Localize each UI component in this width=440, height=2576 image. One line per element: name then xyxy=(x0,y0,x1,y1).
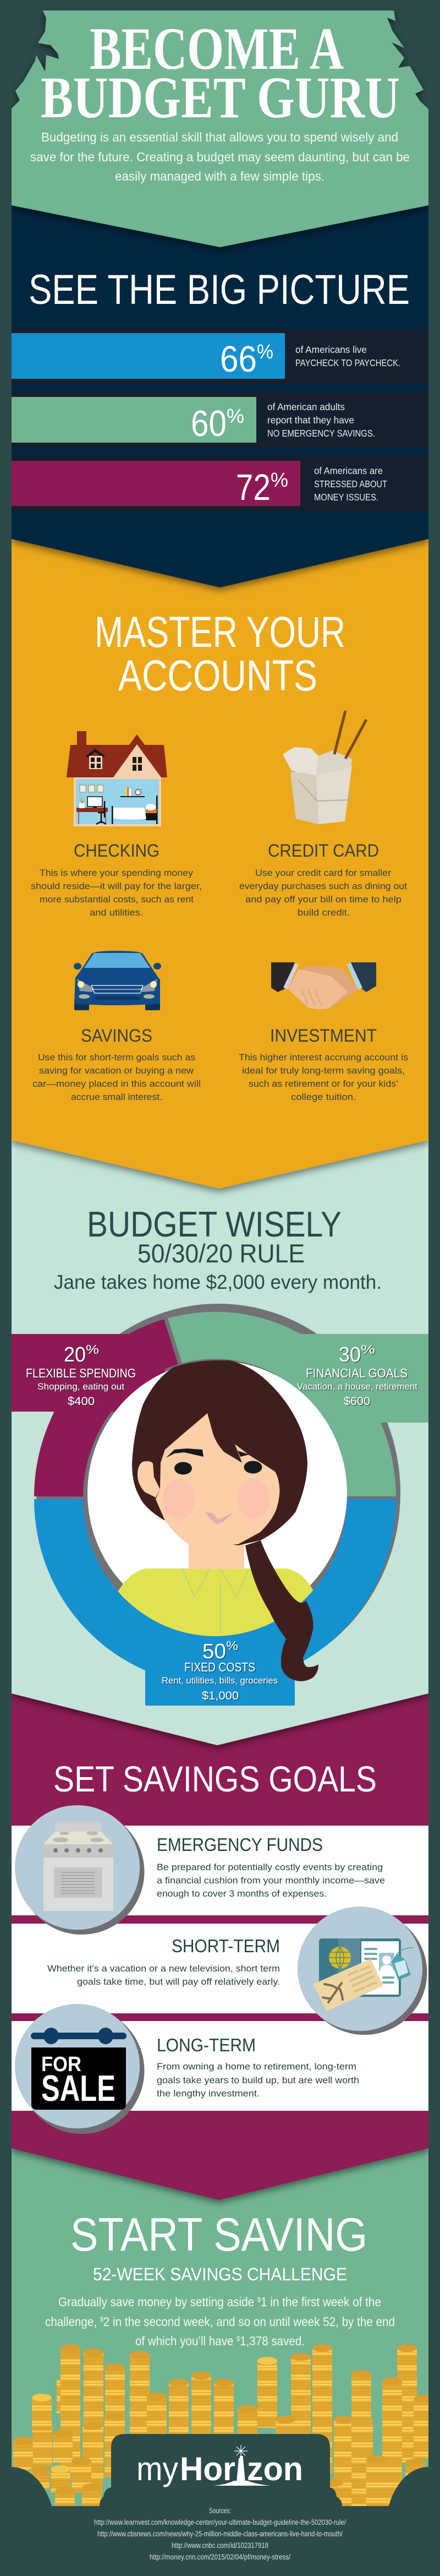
label: 30 percent financial goals: FINANCIAL GOALS xyxy=(306,1366,408,1380)
text: savings challenge: $ xyxy=(257,2296,261,2303)
intro text: easily managed with a few simple tips. xyxy=(115,169,324,183)
account: checking: and utilities. xyxy=(90,907,143,918)
text: savings challenge: 1,378 xyxy=(240,2334,268,2348)
account: savings: saving for vacation or buying a new xyxy=(39,1065,194,1076)
label: 30 percent financial goals: $600 xyxy=(344,1395,370,1408)
panel: budget wisely background xyxy=(12,1134,428,1745)
stat row: 60 percent: report that they have xyxy=(267,415,354,426)
panel: emergency funds xyxy=(12,1826,428,1915)
label: 20 percent flexible spending: 20 xyxy=(64,1343,86,1366)
heading: budget wisely xyxy=(54,1204,382,1293)
stat row: 66 percent: of Americans live xyxy=(295,344,367,355)
label: 50 percent fixed costs: % xyxy=(226,1638,238,1653)
panel: short-term: SHORT-TERM xyxy=(172,1936,280,1956)
heading: master your accounts: ACCOUNTS xyxy=(118,651,317,700)
icon: for sale sign: FOR xyxy=(41,2053,81,2076)
panel: short-term: goals take time, but will pay off relatively early. xyxy=(77,1976,280,1987)
stat row: 72 percent: % xyxy=(271,469,288,491)
heading: budget wisely: 50/30/20 RULE xyxy=(138,1239,305,1268)
label: 50 percent fixed costs: $1,000 xyxy=(202,1690,239,1702)
label: 20 percent flexible spending: % xyxy=(86,1342,99,1357)
account: credit card: and pay off your bill on time to help xyxy=(245,894,402,905)
icon: for sale sign: SALE xyxy=(41,2068,116,2109)
account: checking: CHECKING xyxy=(74,841,160,861)
account: investment: such as retirement or for your kids’ xyxy=(249,1079,398,1089)
account: checking: should reside—it will pay for the larger, xyxy=(31,881,202,891)
account: savings: Use this for short-term goals such as xyxy=(38,1052,195,1063)
logo: myHorizon: my xyxy=(136,2450,178,2487)
account: savings: SAVINGS xyxy=(81,1026,152,1045)
stat row: 60 percent: NO EMERGENCY SAVINGS. xyxy=(267,428,375,439)
icon: stove xyxy=(15,1805,144,1935)
text: savings challenge: of which you’ll have xyxy=(135,2334,245,2348)
panel: long-term: the lengthy investment. xyxy=(157,2088,260,2099)
panel: short-term: Whether it’s a vacation or a new television, short term xyxy=(47,1963,280,1974)
panel: short-term xyxy=(12,1924,428,2013)
account: investment: college tuition. xyxy=(291,1092,356,1102)
panel: set savings goals background xyxy=(12,1685,428,2200)
panel: long-term xyxy=(12,2021,428,2111)
panel: emergency funds: enough to cover 3 months of expenses. xyxy=(157,1888,327,1899)
sources: http://www.cbsnews.com/news/why-25-million-middle-class-americans-live-hand-to-mouth/ xyxy=(97,2529,343,2538)
label: 20 percent flexible spending: Shopping, eating out xyxy=(37,1382,124,1392)
text: savings challenge: $ xyxy=(237,2335,240,2343)
heading: master your accounts xyxy=(95,607,345,700)
logo tab xyxy=(100,2434,342,2506)
panel: long-term: LONG-TERM xyxy=(157,2035,256,2055)
sources: http://www.learnvest.com/knowledge-center/your-ultimate-budget-guideline-the-502030-rule/ xyxy=(94,2518,346,2526)
icon: house xyxy=(67,731,167,826)
text: savings challenge: challenge, xyxy=(45,2314,103,2329)
chart: 50/30/20 donut xyxy=(12,1304,428,1706)
account: savings xyxy=(32,1026,201,1102)
label: 50 percent fixed costs: Rent, utilities, bills, groceries xyxy=(162,1676,278,1686)
intro text: save for the future. Creating a budget may seem daunting, but can be xyxy=(30,150,410,164)
text: savings challenge: $ xyxy=(100,2316,103,2323)
text: savings challenge: 2 xyxy=(103,2314,109,2329)
panel: see the big picture background xyxy=(12,198,428,587)
account: investment: INVESTMENT xyxy=(270,1026,377,1045)
footer corner: right xyxy=(389,2467,428,2506)
stat row: 60 percent: % xyxy=(227,405,244,427)
illustration: Jane xyxy=(113,1360,318,1681)
heading: budget wisely: Jane takes home $2,000 every month. xyxy=(54,1271,382,1293)
panel: long-term: goals take years to build up, but are well worth xyxy=(157,2075,359,2085)
text: savings challenge: Gradually save money by setting aside xyxy=(58,2295,276,2309)
heading: start saving xyxy=(70,2209,367,2284)
heading: set savings goals: SET SAVINGS GOALS xyxy=(53,1758,377,1799)
account: checking xyxy=(31,841,202,918)
stat row: 66 percent: 66 xyxy=(220,339,257,380)
logo: myHorizon: i xyxy=(238,2450,245,2487)
stat row: 72 percent xyxy=(12,455,428,512)
account: checking: This is where your spending money xyxy=(40,868,194,878)
panel: long-term: From owning a home to retirement, long-term xyxy=(157,2061,356,2072)
stat row: 66 percent xyxy=(12,329,428,384)
label: 30 percent financial goals: 30 xyxy=(339,1343,361,1366)
logo: myHorizon xyxy=(136,2445,303,2487)
stat row: 66 percent: PAYCHECK TO PAYCHECK. xyxy=(295,357,400,368)
label: 50 percent fixed costs: FIXED COSTS xyxy=(184,1660,255,1674)
label: 30 percent financial goals: Vacation, a house, retirement xyxy=(297,1382,417,1392)
logo: myHorizon: zon xyxy=(247,2450,303,2487)
label: 30 percent financial goals xyxy=(297,1342,417,1408)
illustration: coin stacks xyxy=(13,2344,433,2506)
account: credit card: Use your credit card for smaller xyxy=(255,868,391,878)
panel: header banner xyxy=(12,10,428,247)
stat row: 72 percent: of Americans are xyxy=(314,465,383,476)
icon: takeout box xyxy=(283,711,366,824)
icon: for sale sign xyxy=(15,2004,144,2134)
account: credit card: build credit. xyxy=(298,907,350,918)
intro text: Budgeting is an essential skill that allows you to spend wisely and xyxy=(41,130,398,144)
stat row: 66 percent: % xyxy=(257,340,273,363)
stat row: 72 percent: STRESSED ABOUT xyxy=(314,478,387,489)
panel: emergency funds: EMERGENCY FUNDS xyxy=(157,1834,323,1855)
label: 20 percent flexible spending: FLEXIBLE SPENDING xyxy=(26,1366,136,1380)
text: savings challenge xyxy=(45,2295,395,2348)
label: 20 percent flexible spending xyxy=(26,1342,136,1408)
panel: master your accounts background xyxy=(12,529,428,1189)
account: investment: This higher interest accruing account is xyxy=(239,1052,408,1063)
sources: Sources: xyxy=(209,2506,231,2515)
account: savings: accrue small interest. xyxy=(71,1092,162,1102)
account: checking: more substantial costs, such as rent xyxy=(40,894,194,905)
stat row: 72 percent: MONEY ISSUES. xyxy=(314,492,378,503)
icon: handshake xyxy=(271,962,376,1009)
account: investment: ideal for truly long-term saving goals, xyxy=(242,1065,405,1076)
stat row: 60 percent: 60 xyxy=(191,403,227,444)
account: savings: car—money placed in this account will xyxy=(32,1079,201,1089)
stat row: 60 percent xyxy=(12,391,428,448)
sources: http://money.cnn.com/2015/02/04/pf/money-stress/ xyxy=(150,2552,290,2561)
panel: emergency funds: a financial cushion from your monthly income—save xyxy=(157,1875,385,1886)
text: savings challenge: in the second week, and so on until week 52, by the end xyxy=(113,2314,427,2329)
heading: start saving: 52-WEEK SAVINGS CHALLENGE xyxy=(93,2264,347,2284)
stat row: 72 percent: 72 xyxy=(236,467,271,508)
text: savings challenge: 1 xyxy=(261,2295,267,2309)
sources: http://www.cnbc.com/id/102317918 xyxy=(172,2541,268,2550)
sources xyxy=(94,2506,346,2561)
intro text xyxy=(30,130,410,183)
account: credit card: everyday purchases such as dining out xyxy=(239,881,407,891)
footer corner: left xyxy=(12,2467,52,2506)
logo: myHorizon: Hor xyxy=(180,2450,235,2487)
label: 50 percent fixed costs xyxy=(162,1638,278,1702)
label: 20 percent flexible spending: $400 xyxy=(68,1395,95,1408)
heading: start saving: START SAVING xyxy=(70,2209,367,2261)
icon: passport and ticket xyxy=(298,1907,427,2035)
account: investment xyxy=(239,1026,408,1102)
account: credit card: CREDIT CARD xyxy=(268,841,379,861)
label: 30 percent financial goals: % xyxy=(361,1342,375,1357)
panel: start saving background xyxy=(12,2142,428,2506)
icon: car xyxy=(74,951,161,1010)
text: savings challenge: saved. xyxy=(272,2334,309,2348)
title xyxy=(41,15,400,130)
label: 50 percent fixed costs: 50 xyxy=(202,1640,226,1663)
account: credit card xyxy=(239,841,407,918)
title: BECOME A xyxy=(90,15,344,82)
heading: budget wisely: BUDGET WISELY xyxy=(87,1204,342,1244)
stat row: 60 percent: of American adults xyxy=(267,401,345,412)
panel: emergency funds: Be prepared for potentially costly events by creating xyxy=(157,1862,383,1872)
heading: master your accounts: MASTER YOUR xyxy=(95,607,345,656)
text: savings challenge: in the first week of the xyxy=(271,2295,394,2309)
